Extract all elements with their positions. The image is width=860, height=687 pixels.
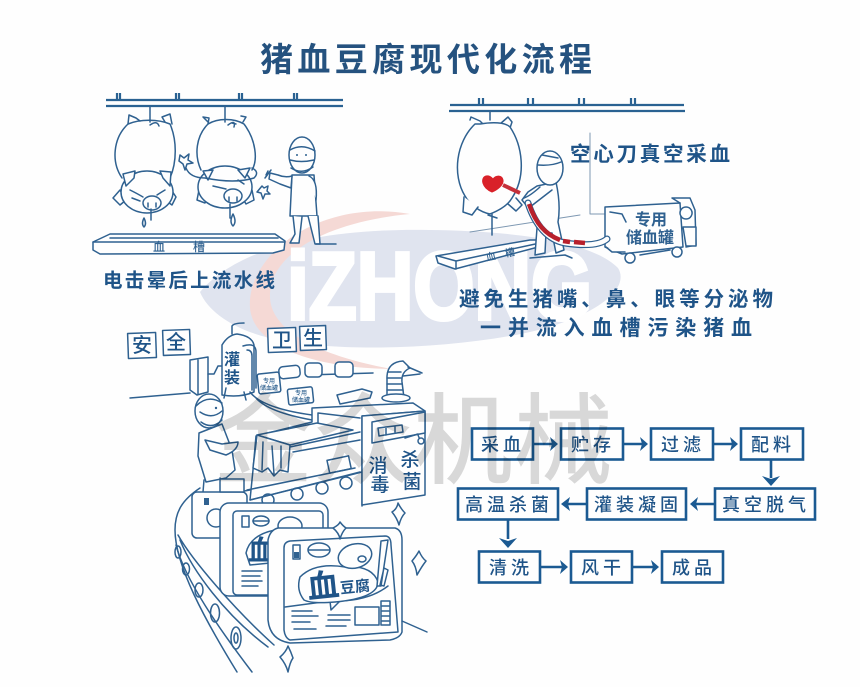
step: 高温杀菌 — [458, 488, 558, 520]
sign: safety: 全 — [166, 331, 186, 354]
panel: vacuum blood collection — [436, 98, 773, 340]
conveyor with boxes: 专用 — [295, 389, 307, 397]
sign: safety: 安 — [132, 334, 152, 357]
step: 灌装凝固: 灌装凝固 — [594, 495, 682, 515]
trough 1: 血 — [153, 240, 165, 254]
panel: filling and sterilising — [128, 323, 427, 672]
front package: 血 — [305, 566, 341, 606]
step: 过滤 — [651, 428, 713, 460]
exhaust duct — [382, 361, 422, 402]
step: 采血 — [472, 428, 533, 460]
row 3 arrows — [540, 566, 653, 568]
filling tank — [130, 323, 256, 400]
overhead rail 2 — [449, 98, 685, 111]
row 2 arrows — [508, 504, 715, 539]
step: 贮存: 贮存 — [571, 435, 615, 455]
trough 2: 血 — [485, 249, 497, 264]
blood hose — [528, 203, 607, 245]
step: 配料 — [741, 428, 803, 460]
conveyor with boxes: 专用 — [263, 377, 275, 385]
step: 风干: 风干 — [581, 558, 625, 578]
pig 2 dizzy — [179, 106, 270, 226]
sterilizer machine: 杀 — [400, 449, 420, 471]
row 1 arrows — [533, 444, 771, 478]
curved conveyor — [175, 468, 360, 672]
pig 1 — [113, 106, 176, 227]
storage tank — [605, 198, 696, 263]
trough 1: 槽 — [193, 239, 205, 254]
worker 2 — [522, 151, 572, 258]
trough 2: 槽 — [504, 245, 516, 260]
step: 真空脱气 — [715, 488, 815, 520]
caption: hollow knife: 空心刀真空采血 — [570, 142, 730, 166]
step: 清洗: 清洗 — [489, 558, 533, 578]
wall lines — [470, 133, 604, 232]
step: 贮存 — [561, 428, 623, 460]
filling tank: 灌 — [224, 351, 240, 369]
sterilizer machine — [250, 403, 425, 506]
step: 高温杀菌: 高温杀菌 — [465, 495, 553, 515]
watermark: iZHONG logo — [200, 211, 621, 369]
overhead rail 1 — [106, 93, 343, 106]
storage tank: 专用 — [635, 211, 667, 229]
caption: stunning: 电击晕后上流水线 — [103, 270, 275, 292]
caption: avoid contamination: 避免生猪嘴、鼻、眼等分泌物 — [459, 288, 773, 311]
title: 猪血豆腐现代化流程 — [260, 41, 592, 78]
step: 成品: 成品 — [672, 558, 716, 578]
sterilizer machine: 菌 — [402, 471, 422, 493]
middle package — [220, 503, 328, 596]
step: 过滤: 过滤 — [661, 435, 705, 455]
trough 1 — [93, 234, 285, 254]
step: 风干 — [571, 552, 632, 582]
pig 3 with heart — [457, 111, 522, 235]
flowchart — [458, 428, 815, 582]
back package — [192, 479, 247, 538]
worker 1 — [265, 137, 336, 244]
watermark: iZHONG logo: iZHONG — [287, 233, 592, 340]
sign: safety — [128, 330, 190, 358]
sign: hygiene: 卫 — [272, 330, 292, 352]
sterilizer machine: 消 — [368, 455, 388, 477]
sign: hygiene: 生 — [303, 327, 323, 350]
conveyor with boxes — [250, 362, 373, 420]
front package: 豆腐 — [339, 576, 371, 598]
conveyor with boxes: 储血罐 — [292, 396, 310, 404]
step: 配料: 配料 — [751, 435, 795, 455]
conveyor with boxes: 储血罐 — [260, 384, 278, 392]
panel: stunning line — [93, 93, 343, 292]
sparkles — [280, 503, 426, 672]
storage tank: 储血罐 — [626, 228, 674, 247]
step: 成品 — [662, 552, 723, 582]
step: 清洗 — [479, 552, 540, 582]
caption: avoid contamination line 2: 一并流入血槽污染猪血 — [480, 317, 752, 340]
sign: hygiene — [268, 326, 326, 352]
worker 3 — [195, 394, 238, 492]
watermark: company name: 金众机械 — [214, 386, 612, 496]
middle package: 血 — [248, 535, 276, 566]
step: 灌装凝固 — [587, 488, 686, 520]
step: 真空脱气: 真空脱气 — [722, 495, 810, 515]
trough 2 — [436, 240, 544, 269]
sterilizer machine: 毒 — [370, 474, 390, 496]
filling tank: 装 — [224, 369, 240, 387]
step: 采血: 采血 — [481, 435, 525, 455]
front package — [268, 528, 427, 643]
